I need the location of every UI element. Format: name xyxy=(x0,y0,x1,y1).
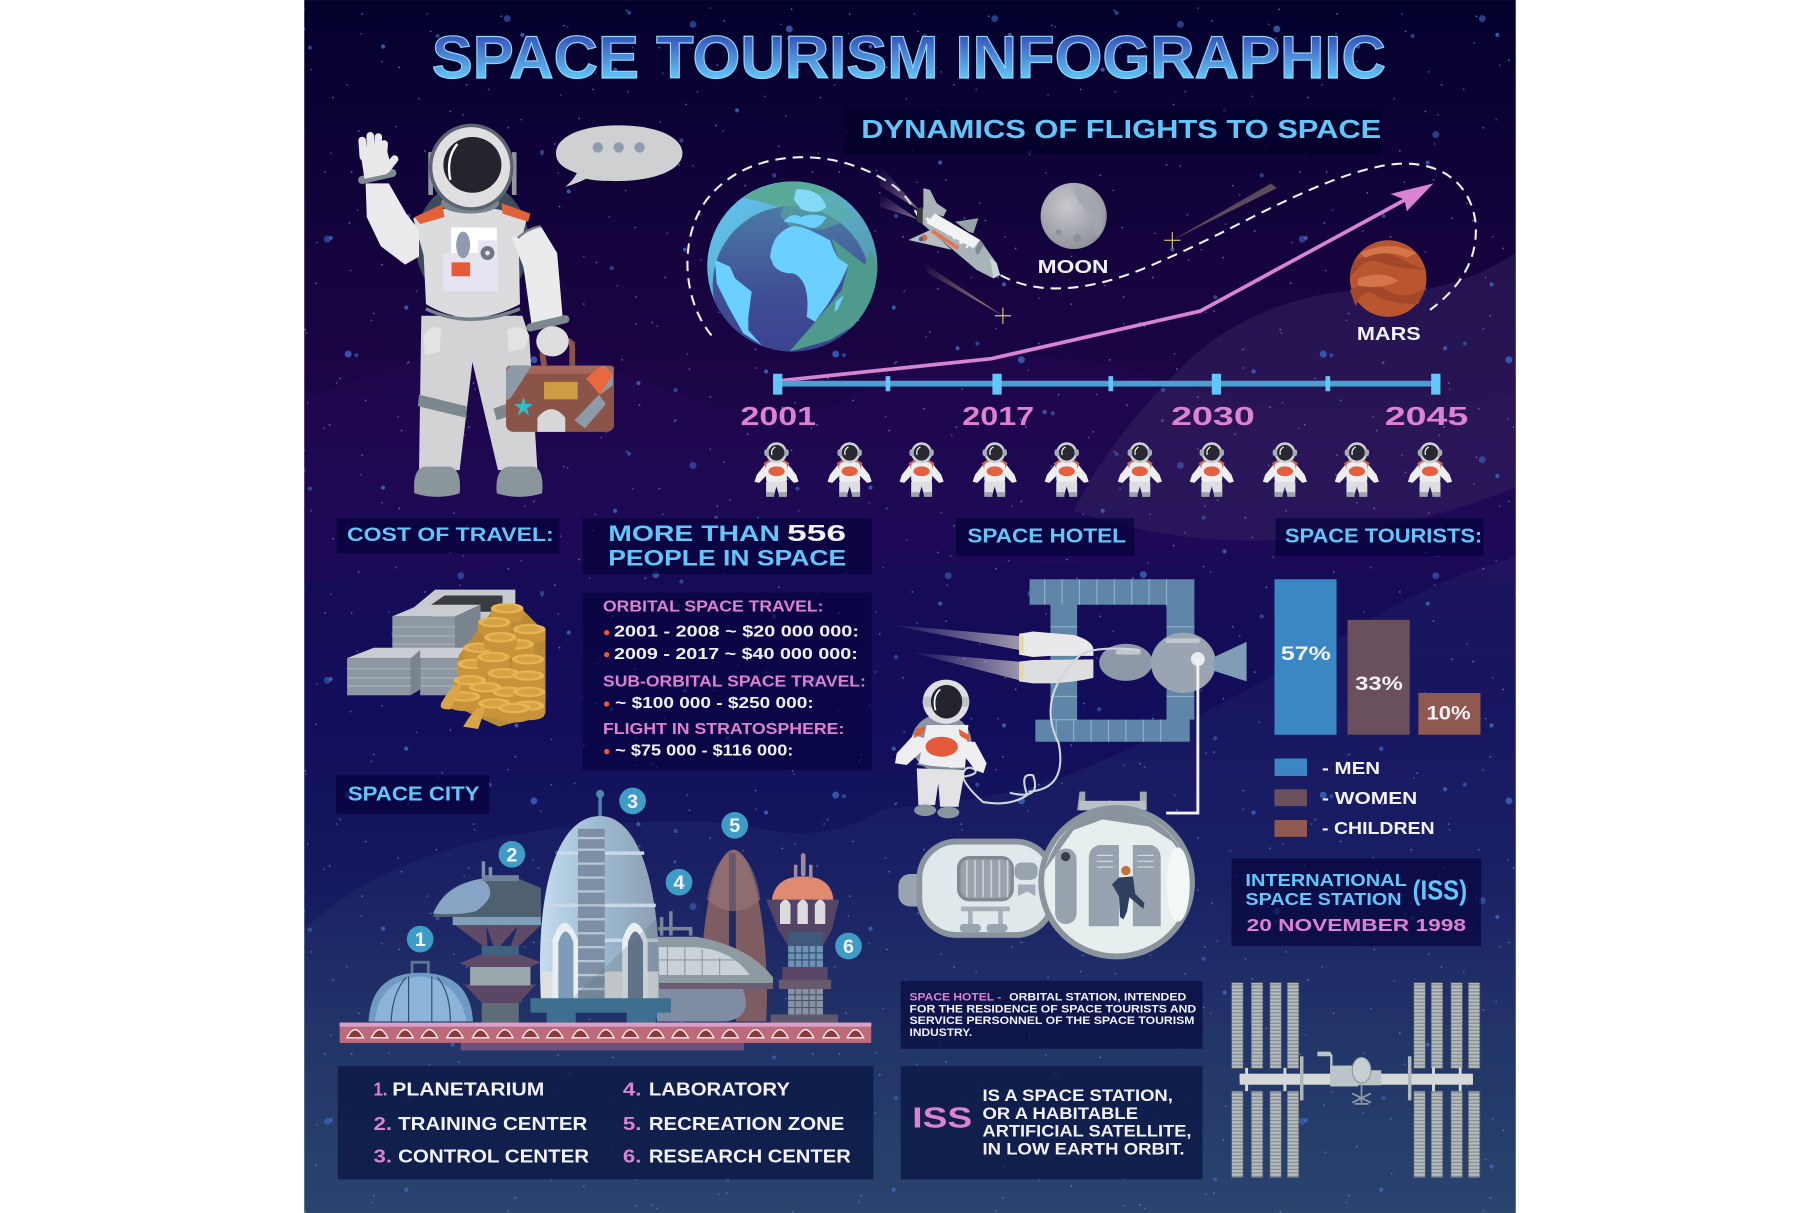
chart legend: - CHILDREN xyxy=(1322,818,1435,838)
panel: ISS definition: IN LOW EARTH ORBIT. xyxy=(983,1139,1185,1158)
heading: space hotel xyxy=(956,518,1134,556)
building 2: training center xyxy=(433,861,541,1023)
panel: space hotel description: SERVICE PERSONNEL OF THE SPACE TOURISM xyxy=(910,1015,1194,1027)
moon xyxy=(1038,183,1108,277)
money and coins xyxy=(347,590,546,729)
panel: city legend: 5. xyxy=(623,1113,641,1134)
panel: city legend: RESEARCH CENTER xyxy=(649,1146,851,1167)
panel: city legend: 2. xyxy=(374,1113,392,1134)
speech bubble xyxy=(556,125,682,187)
heading: people in space: 556 xyxy=(787,520,846,546)
panel: ISS definition: OR A HABITABLE xyxy=(983,1104,1138,1123)
timeline: 2001 xyxy=(741,403,816,431)
number badges xyxy=(407,788,862,959)
panel: space hotel description xyxy=(901,981,1202,1049)
connector line xyxy=(1166,652,1205,813)
panel: international space station: SPACE STATION xyxy=(1245,889,1402,909)
ISS station illustration xyxy=(1232,983,1480,1178)
hotel capsule xyxy=(898,792,1192,956)
heading: space hotel: SPACE HOTEL xyxy=(967,526,1126,548)
tethered astronaut xyxy=(895,649,1140,818)
panel: ISS definition: ISS xyxy=(912,1103,972,1135)
space city illustration xyxy=(340,788,871,1050)
panel: travel prices: ~ $75 000 - $116 000: xyxy=(615,743,793,760)
panel: space hotel description: FOR THE RESIDENCE OF SPACE TOURISTS AND xyxy=(910,1003,1196,1015)
panel: space hotel description: SPACE HOTEL - xyxy=(910,992,1001,1004)
heading: cost of travel xyxy=(337,518,559,553)
building 1: planetarium xyxy=(369,962,473,1021)
panel: ISS definition xyxy=(901,1066,1202,1179)
astronaut with suitcase xyxy=(360,125,614,497)
panel: travel prices: 2009 - 2017 ~ $40 000 000: xyxy=(614,646,858,663)
shooting stars xyxy=(923,183,1277,324)
panel: city legend: LABORATORY xyxy=(649,1079,791,1100)
heading: space tourists xyxy=(1276,518,1483,556)
bar chart: space tourists xyxy=(1274,579,1480,735)
mars xyxy=(1350,240,1427,344)
building 4: laboratory xyxy=(657,911,773,1021)
panel: ISS definition: IS A SPACE STATION, xyxy=(983,1086,1173,1105)
panel: city legend: RECREATION ZONE xyxy=(649,1113,844,1134)
panel: international space station: 20 NOVEMBER 1998 xyxy=(1247,915,1466,935)
heading: space tourists: SPACE TOURISTS: xyxy=(1285,526,1482,548)
panel: international space station: INTERNATIONAL xyxy=(1245,870,1407,890)
space shuttle xyxy=(880,165,1000,278)
panel: city legend xyxy=(338,1066,873,1179)
heading: dynamics of flights: DYNAMICS OF FLIGHTS TO SPACE xyxy=(861,116,1381,144)
background: deep space xyxy=(304,0,1516,1213)
heading: people in space: PEOPLE IN SPACE xyxy=(608,545,846,570)
panel: city legend: 4. xyxy=(623,1079,641,1100)
panel: international space station xyxy=(1232,858,1481,946)
panel: city legend: CONTROL CENTER xyxy=(398,1146,590,1167)
panel: travel prices: FLIGHT IN STRATOSPHERE: xyxy=(603,721,844,738)
space station with solar frame xyxy=(888,579,1247,742)
row of ten astronauts xyxy=(754,442,1452,497)
chart legend: - WOMEN xyxy=(1322,788,1417,808)
orbit path xyxy=(687,157,1476,335)
chart legend: - MEN xyxy=(1322,758,1380,778)
heading: space city: SPACE CITY xyxy=(348,784,480,806)
title: SPACE TOURISM INFOGRAPHIC xyxy=(432,23,1386,91)
building 5: recreation zone xyxy=(701,850,767,1021)
platform xyxy=(340,1023,871,1050)
growth arrow xyxy=(780,183,1433,381)
panel: travel prices xyxy=(583,593,872,770)
earth xyxy=(707,181,878,352)
heading: people in space xyxy=(583,518,872,574)
number badges: 6 xyxy=(843,936,854,958)
panel: travel prices: ORBITAL SPACE TRAVEL: xyxy=(603,599,824,616)
bar chart: space tourists: 57% xyxy=(1281,643,1331,665)
panel: travel prices: 2001 - 2008 ~ $20 000 000: xyxy=(614,624,859,641)
panel: space hotel description: INDUSTRY. xyxy=(910,1027,972,1039)
number badges: 2 xyxy=(506,844,517,866)
bar chart: space tourists: 33% xyxy=(1355,673,1403,695)
panel: international space station: (ISS) xyxy=(1413,875,1467,906)
panel: ISS definition: ARTIFICIAL SATELLITE, xyxy=(983,1122,1191,1141)
building 3: control center xyxy=(530,790,671,1023)
panel: city legend: TRAINING CENTER xyxy=(398,1113,588,1134)
chart legend xyxy=(1274,758,1435,838)
panel: space hotel description: ORBITAL STATION, INTENDED xyxy=(1009,992,1186,1004)
building 6: research center xyxy=(766,853,839,1023)
heading: dynamics of flights xyxy=(844,107,1381,154)
heading: space city xyxy=(336,775,489,814)
number badges: 5 xyxy=(729,815,740,837)
panel: city legend: 1. xyxy=(374,1079,387,1100)
panel: city legend: PLANETARIUM xyxy=(392,1079,544,1100)
number badges: 3 xyxy=(627,791,638,813)
number badges: 4 xyxy=(674,872,685,894)
timeline: 2017 xyxy=(962,403,1034,431)
timeline xyxy=(741,374,1468,431)
panel: city legend: 6. xyxy=(623,1146,641,1167)
panel: travel prices: SUB-ORBITAL SPACE TRAVEL: xyxy=(603,674,866,691)
timeline: 2030 xyxy=(1171,403,1255,431)
moon: MOON xyxy=(1038,256,1108,277)
panel: travel prices: ~ $100 000 - $250 000: xyxy=(615,695,814,712)
number badges: 1 xyxy=(415,929,426,951)
mars: MARS xyxy=(1357,323,1421,344)
bar chart: space tourists: 10% xyxy=(1427,703,1471,725)
panel: city legend: 3. xyxy=(374,1146,392,1167)
heading: people in space: MORE THAN xyxy=(608,521,780,546)
heading: cost of travel: COST OF TRAVEL: xyxy=(347,524,554,546)
timeline: 2045 xyxy=(1385,403,1468,431)
